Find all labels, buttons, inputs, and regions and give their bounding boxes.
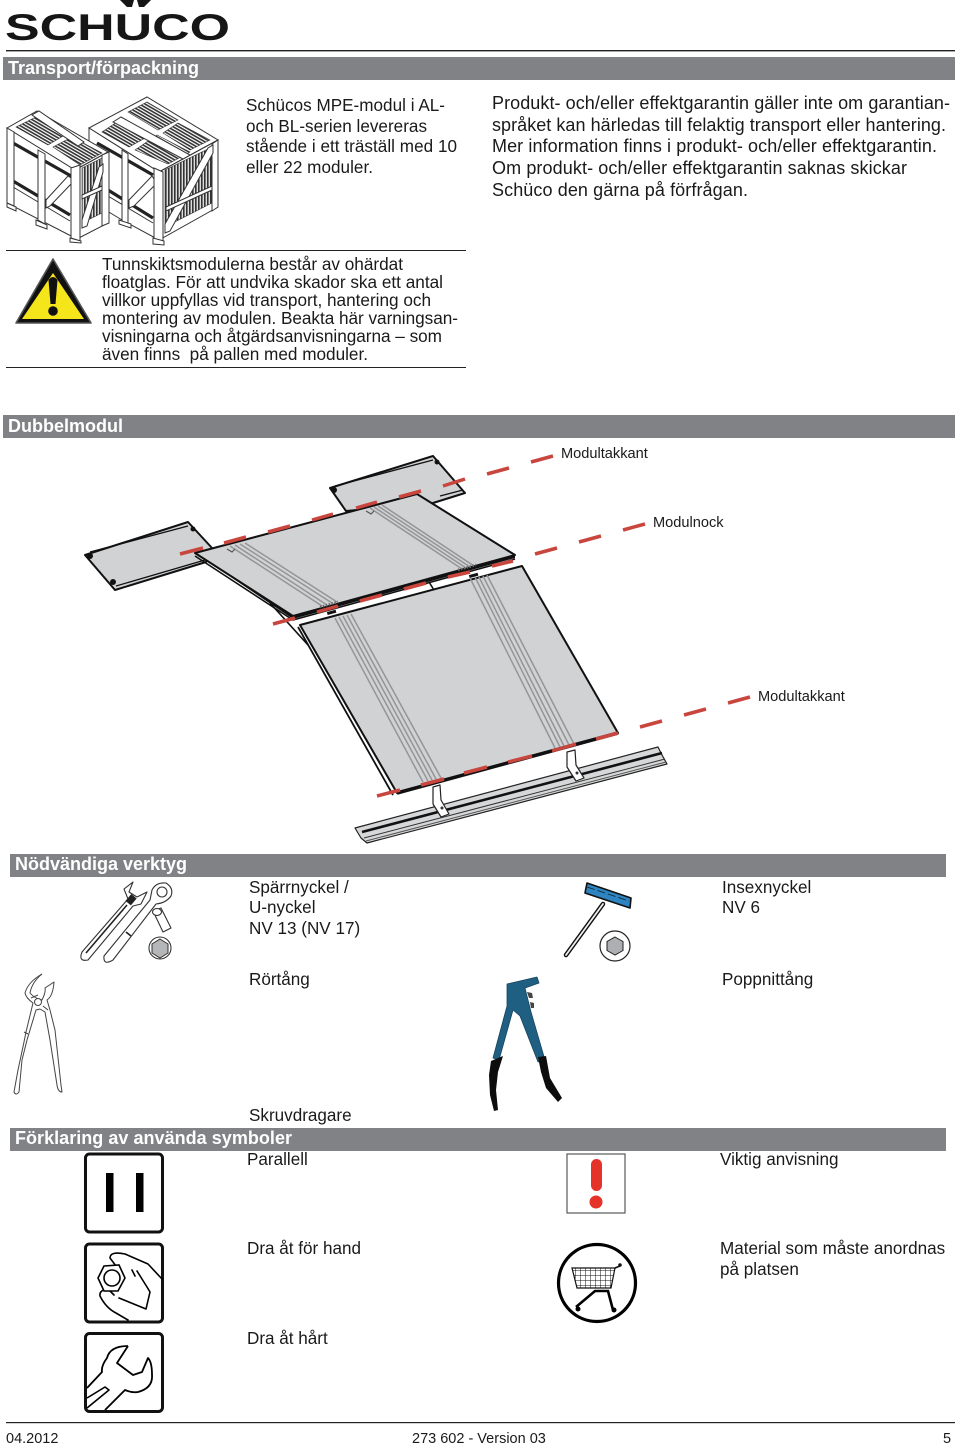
panel: middle module <box>195 494 515 620</box>
text: warning: Tunnskiktsmodulerna består av ohärdat <box>102 254 403 274</box>
warning block <box>6 250 466 368</box>
label: Spärrnyckel <box>249 878 360 938</box>
label: Dra åt för hand: Dra åt för hand <box>247 1239 361 1258</box>
label: Spärrnyckel: NV 13 (NV 17) <box>249 919 360 938</box>
clamp: right <box>567 750 584 781</box>
heading: Nödvändiga verktyg: Nödvändiga verktyg <box>15 854 187 874</box>
icon: water pump pliers <box>14 974 62 1094</box>
text: warranty note: Om produkt- och/eller effektgarantin saknas skickar <box>492 158 907 178</box>
icon: important note <box>567 1154 625 1213</box>
footer rule <box>6 1422 955 1423</box>
dashed line: upper eave <box>180 456 553 554</box>
text: warning: floatglas. För att undvika skador ska ett antal <box>102 272 443 292</box>
text: delivery description <box>246 96 457 177</box>
label: Poppnittång: Poppnittång <box>722 970 813 989</box>
label: Viktig anvisning: Viktig anvisning <box>720 1150 838 1169</box>
dashed line: lower eave <box>377 697 750 796</box>
label: Insexnyckel: NV 6 <box>722 898 760 917</box>
text: warranty note: Mer information finns i produkt- och/eller effektgarantin. <box>492 136 937 156</box>
dashed line: ridge <box>273 524 645 624</box>
label: Rörtång: Rörtång <box>249 970 310 989</box>
icon: rivet tool <box>489 977 562 1111</box>
label: Dra åt hårt: Dra åt hårt <box>247 1329 328 1348</box>
icon: tighten hard <box>86 1334 162 1412</box>
text: warranty note <box>492 93 950 200</box>
heading: Dubbelmodul <box>3 415 955 438</box>
heading: Dubbelmodul: Dubbelmodul <box>8 416 123 436</box>
illustration: two wooden crates <box>7 97 218 245</box>
heading: Nödvändiga verktyg <box>10 854 946 877</box>
text: warranty note: Schüco den gärna på förfrågan. <box>492 180 748 200</box>
text: delivery description: Schücos MPE-modul i AL- <box>246 96 445 115</box>
logo: Schüco: SCHÜCO <box>5 6 230 48</box>
panel: lower module <box>298 566 618 795</box>
icon: tighten by hand <box>86 1244 162 1322</box>
label: Modultakkant top: Modultakkant <box>561 446 648 462</box>
clamp: left <box>433 785 449 817</box>
text: warning: även finns på pallen med moduler. <box>102 344 368 364</box>
text: warranty note: språket kan härledas till felaktig transport eller hantering. <box>492 115 946 135</box>
text: delivery description: och BL-serien levereras <box>246 117 427 136</box>
text: warning <box>102 254 458 364</box>
support lines <box>270 582 434 645</box>
text: delivery description: eller 22 moduler. <box>246 158 373 177</box>
label: Insexnyckel <box>722 878 811 917</box>
text: warranty note: Produkt- och/eller effektgarantin gäller inte om garantian- <box>492 93 950 113</box>
label: Parallell: Parallell <box>247 1150 308 1169</box>
text: warning: montering av modulen. Beakta här varningsan- <box>102 308 458 328</box>
icon: hex key with blue handle <box>566 883 631 961</box>
label: Spärrnyckel: Spärrnyckel / <box>249 878 349 897</box>
label: Skruvdragare: Skruvdragare <box>249 1106 352 1125</box>
crate: small left <box>7 111 109 243</box>
label: Modulnock: Modulnock <box>653 515 724 531</box>
label: Material <box>720 1239 945 1279</box>
rail <box>355 747 667 843</box>
text: warning: visningarna och åtgärdsanvisningarna – som <box>102 326 442 346</box>
label: Modultakkant bottom: Modultakkant <box>758 689 845 705</box>
label: Material: Material som måste anordnas <box>720 1239 945 1258</box>
crate: large right <box>89 97 218 245</box>
text: delivery description: stående i ett träställ med 10 <box>246 137 457 156</box>
icon: shopping cart <box>558 1244 636 1322</box>
icon: parallel <box>86 1154 162 1232</box>
label: Insexnyckel: Insexnyckel <box>722 878 811 897</box>
heading: Transport/förpackning: Transport/förpackning <box>8 58 199 78</box>
panel: rear small <box>330 456 465 511</box>
heading: Transport/förpackning <box>3 57 955 80</box>
panel: left small <box>85 522 212 590</box>
label: Spärrnyckel: U-nyckel <box>249 898 316 917</box>
header rule <box>6 50 955 51</box>
diagram: double module <box>85 446 845 843</box>
label: Material: på platsen <box>720 1260 799 1279</box>
logo: Schüco <box>5 0 230 48</box>
icon: wrench and ratchet <box>81 882 172 962</box>
heading: Förklaring av använda symboler <box>10 1128 946 1151</box>
heading: Förklaring av använda symboler: Förklaring av använda symboler <box>15 1128 292 1148</box>
icon: warning triangle <box>16 259 91 323</box>
text: warning: villkor uppfyllas vid transport, hantering och <box>102 290 431 310</box>
